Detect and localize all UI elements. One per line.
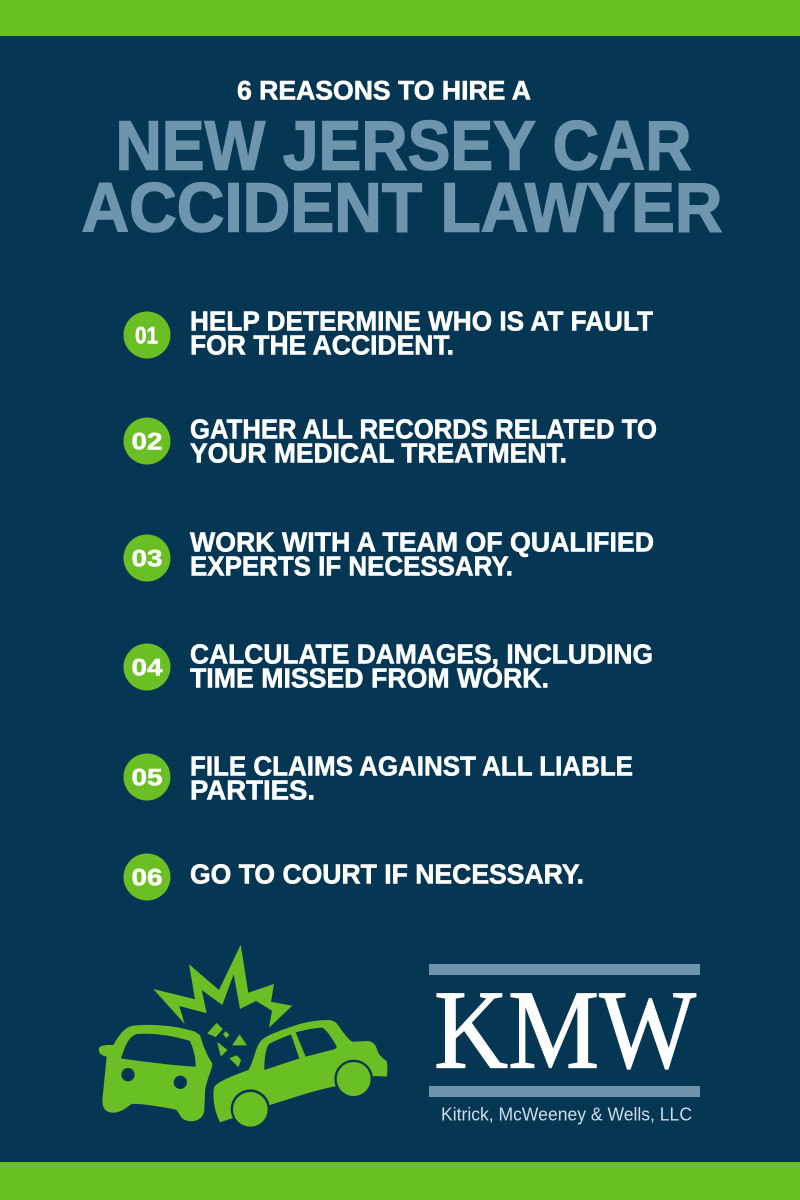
- reason 05: [124, 751, 633, 806]
- reason 04: 04: [132, 655, 163, 682]
- reason 06: GO TO COURT IF NECESSARY.: [190, 859, 584, 890]
- reason 03: [124, 527, 654, 582]
- reason 01: HELP DETERMINE WHO IS AT FAULT: [190, 306, 653, 337]
- icon: impact burst: [153, 945, 292, 1028]
- heading: title line 2: ACCIDENT LAWYER: [82, 168, 722, 246]
- reason 04: CALCULATE DAMAGES, INCLUDING: [190, 639, 653, 670]
- icon: right car: [213, 1020, 387, 1129]
- reason 05: PARTIES.: [190, 775, 315, 806]
- reason 05: FILE CLAIMS AGAINST ALL LIABLE: [190, 751, 633, 782]
- top green band: [0, 0, 800, 36]
- title block: [82, 76, 722, 246]
- icon: car crash: [99, 945, 387, 1129]
- icon: left car: [99, 1025, 212, 1121]
- heading: kicker: 6 REASONS TO HIRE A: [237, 76, 531, 106]
- reason 04: TIME MISSED FROM WORK.: [190, 663, 549, 694]
- reason 01: 01: [135, 323, 158, 350]
- reason 03: WORK WITH A TEAM OF QUALIFIED: [190, 527, 654, 558]
- reason 02: GATHER ALL RECORDS RELATED TO: [190, 414, 657, 445]
- reason 02: YOUR MEDICAL TREATMENT.: [190, 438, 567, 469]
- reason 02: [124, 414, 657, 469]
- reason 01: FOR THE ACCIDENT.: [190, 330, 454, 361]
- reason 02: 02: [132, 429, 162, 456]
- reason 03: EXPERTS IF NECESSARY.: [190, 551, 513, 582]
- bottom green band: [0, 1162, 800, 1200]
- heading: title line 1: NEW JERSEY CAR: [116, 106, 692, 184]
- reason 04: [124, 639, 653, 694]
- reason 06: 06: [132, 865, 162, 892]
- reason 05: 05: [132, 765, 162, 792]
- logo: KMW: KMW: [434, 968, 696, 1092]
- reasons list: [124, 306, 657, 900]
- logo: KMW: Kitrick, McWeeney & Wells, LLC: [441, 1104, 692, 1124]
- icon: debris: [208, 1023, 246, 1067]
- reason 01: [124, 306, 653, 361]
- reason 06: [124, 854, 584, 900]
- reason 03: 03: [132, 546, 162, 573]
